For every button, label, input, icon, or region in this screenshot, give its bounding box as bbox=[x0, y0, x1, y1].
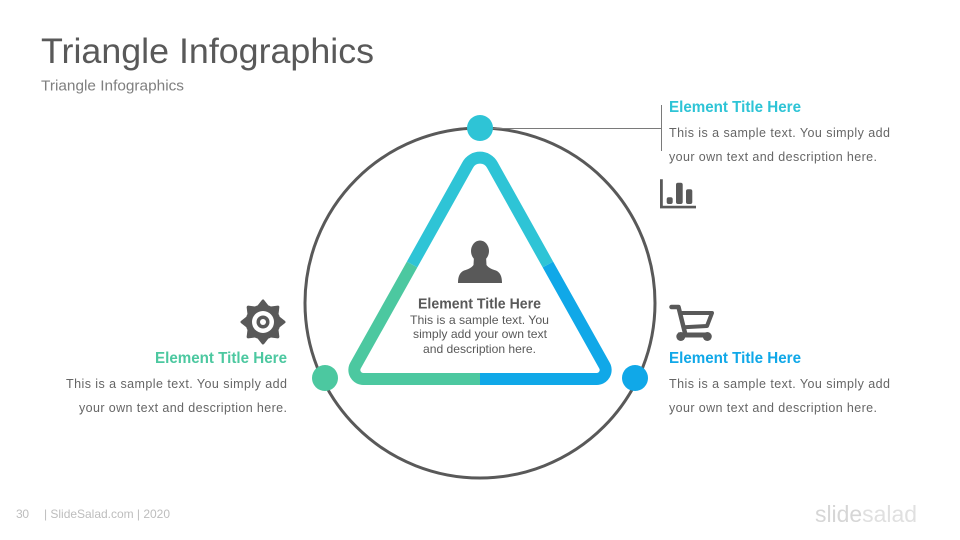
outer circle bbox=[305, 128, 655, 478]
center body text: simply add your own text bbox=[413, 327, 548, 341]
body: left: your own text and description here. bbox=[79, 401, 287, 415]
icon: bar chart bbox=[660, 179, 696, 208]
footer page number: 30 bbox=[16, 507, 29, 521]
center body text bbox=[410, 313, 549, 356]
connector line to top-right text bbox=[493, 105, 662, 151]
left text block bbox=[66, 350, 287, 415]
body: top-right: your own text and description here. bbox=[669, 150, 877, 164]
center text block bbox=[410, 296, 549, 356]
subtitle: Triangle Infographics bbox=[41, 78, 184, 94]
body: top-right: This is a sample text. You simply add bbox=[669, 126, 890, 140]
body: bottom-right bbox=[669, 377, 890, 415]
heading: bottom-right: Element Title Here bbox=[669, 350, 801, 367]
body: left: This is a sample text. You simply add bbox=[66, 377, 287, 391]
heading: left: Element Title Here bbox=[155, 350, 287, 367]
body: top-right bbox=[669, 126, 890, 164]
node: top bbox=[467, 115, 493, 141]
node: left bbox=[312, 365, 338, 391]
heading: top-right: Element Title Here bbox=[669, 99, 801, 116]
bottom-right text block bbox=[669, 350, 890, 415]
node: right bbox=[622, 365, 648, 391]
icon: gear bbox=[242, 301, 284, 343]
body: left bbox=[66, 377, 287, 415]
center heading: Element Title Here bbox=[418, 296, 541, 312]
title: Triangle Infographics bbox=[41, 32, 374, 71]
triangle segment: green bbox=[354, 264, 480, 379]
triangle segment: blue bbox=[480, 264, 606, 379]
triangle segment: cyan bbox=[412, 158, 548, 264]
body: bottom-right: your own text and description here. bbox=[669, 401, 877, 415]
icon: person bbox=[458, 240, 502, 283]
footer credit: | SlideSalad.com | 2020 bbox=[44, 507, 170, 521]
logo wordmark: slidesalad bbox=[815, 501, 917, 527]
center body text: and description here. bbox=[423, 342, 536, 356]
body: bottom-right: This is a sample text. You simply add bbox=[669, 377, 890, 391]
icon: shopping cart bbox=[672, 307, 712, 341]
top-right text block bbox=[669, 99, 890, 164]
center body text: This is a sample text. You bbox=[410, 313, 549, 327]
segmented triangle bbox=[354, 158, 606, 379]
